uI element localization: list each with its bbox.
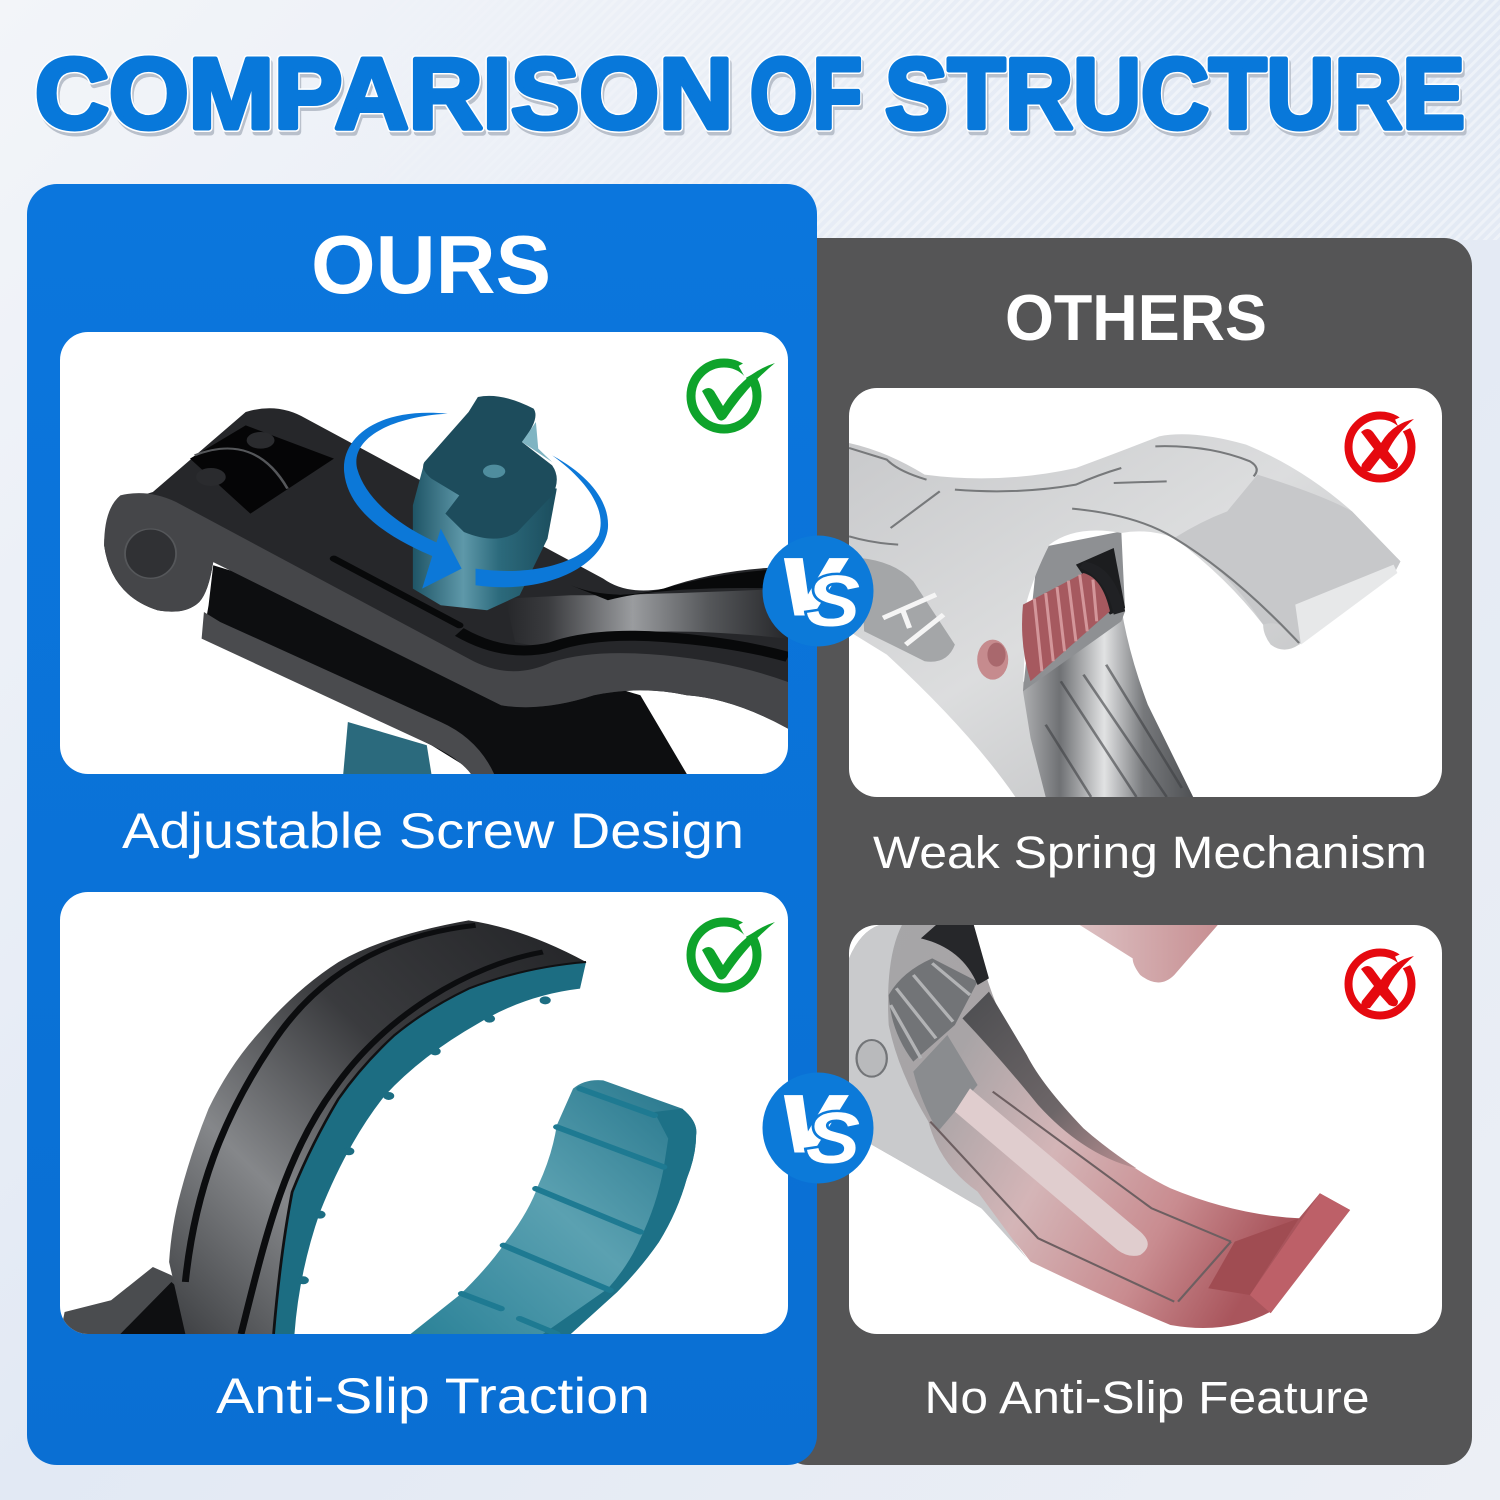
title: STRUCTURE — [885, 38, 1465, 150]
page background — [0, 0, 963, 172]
title — [35, 38, 1467, 154]
title: STRUCTURE — [887, 42, 1467, 154]
badge: vs bottom: S — [806, 1099, 860, 1179]
card: no anti-slip feature — [849, 925, 1442, 1334]
title: OF — [750, 38, 862, 150]
icon: green check — [691, 913, 775, 988]
title: OF — [752, 42, 864, 154]
badge: vs top: S — [806, 562, 860, 642]
badge: vs bottom — [762, 1072, 874, 1184]
title: OF — [750, 38, 862, 150]
badge: vs top: V — [780, 545, 844, 630]
badge: vs top — [762, 536, 874, 646]
panel: others — [780, 238, 1472, 1465]
heading: others: OTHERS — [1005, 281, 1267, 354]
illustration: silver spring clamp — [849, 434, 1400, 797]
illustration: black arc and teal pad — [60, 920, 696, 1334]
icon: red cross — [1348, 414, 1424, 478]
caption: anti-slip traction: Anti-Slip Traction — [216, 1368, 650, 1424]
icon: red cross — [1348, 951, 1424, 1016]
caption: no anti-slip feature: No Anti-Slip Feature — [924, 1372, 1370, 1423]
title: COMPARISON — [35, 38, 733, 150]
panel: ours — [27, 184, 817, 1465]
card: adjustable screw design — [60, 332, 788, 774]
badge: vs bottom: V — [780, 1082, 844, 1167]
title: COMPARISON — [35, 38, 733, 150]
caption: weak spring mechanism: Weak Spring Mechanism — [873, 827, 1427, 878]
title: COMPARISON — [37, 42, 735, 154]
card: anti-slip traction — [60, 892, 788, 1334]
card: weak spring mechanism — [849, 388, 1442, 797]
caption: adjustable screw design: Adjustable Screw Design — [122, 803, 744, 859]
heading: ours: OURS — [311, 218, 551, 311]
illustration: black clamp with teal screw — [104, 396, 788, 774]
title: STRUCTURE — [885, 38, 1465, 150]
illustration: silver clamp arc fading pink — [849, 925, 1350, 1328]
icon: green check — [691, 354, 775, 429]
